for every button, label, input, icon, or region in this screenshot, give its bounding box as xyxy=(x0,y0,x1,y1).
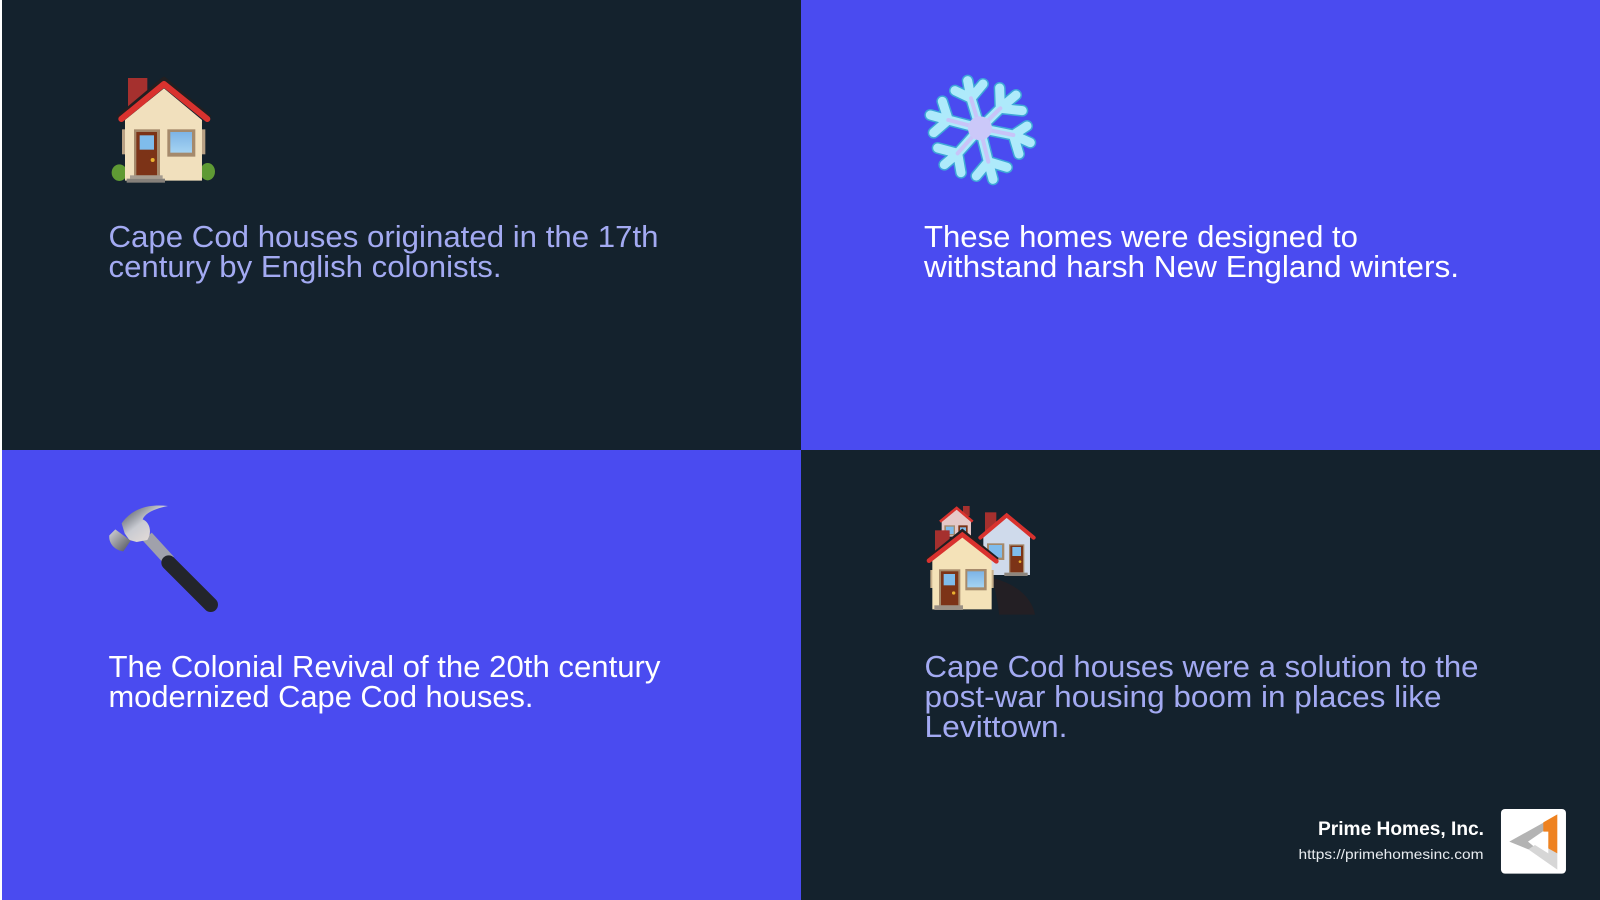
icon: hammer xyxy=(109,505,211,605)
text: post-war xyxy=(924,649,1478,744)
footer: brand name and url: Prime Homes, Inc. xyxy=(1318,819,1484,840)
small rear house xyxy=(940,506,973,537)
footer: brand name and url xyxy=(1298,819,1484,862)
front house xyxy=(927,530,998,610)
text: colonial revival: modernized Cape Cod houses. xyxy=(108,679,534,714)
icon: house xyxy=(112,78,215,183)
text: origins: Cape Cod houses originated in the 17th xyxy=(108,219,658,254)
text: colonial revival xyxy=(108,649,661,714)
panel: colonial revival background xyxy=(2,450,801,900)
logo xyxy=(1501,809,1566,874)
text: origins: century by English colonists. xyxy=(108,249,502,284)
text: origins xyxy=(108,219,658,284)
text: winters: These homes were designed to xyxy=(924,219,1358,254)
text: post-war: post-war housing boom in places like xyxy=(924,679,1442,714)
footer: brand name and url: https://primehomesinc.com xyxy=(1298,846,1484,862)
text: post-war: Levittown. xyxy=(924,709,1068,744)
panel: winters background xyxy=(801,0,1600,450)
text: colonial revival: The Colonial Revival of the 20th century xyxy=(108,649,661,684)
text: winters: withstand harsh New England winters. xyxy=(923,249,1459,284)
text: winters xyxy=(923,219,1459,284)
icon: snowflake xyxy=(930,81,1030,179)
right house xyxy=(980,512,1034,576)
text: post-war: Cape Cod houses were a solution to the xyxy=(924,649,1478,684)
panel: origins background xyxy=(2,0,801,450)
icon: group of houses xyxy=(927,506,1035,615)
panel: post-war background xyxy=(801,450,1600,900)
